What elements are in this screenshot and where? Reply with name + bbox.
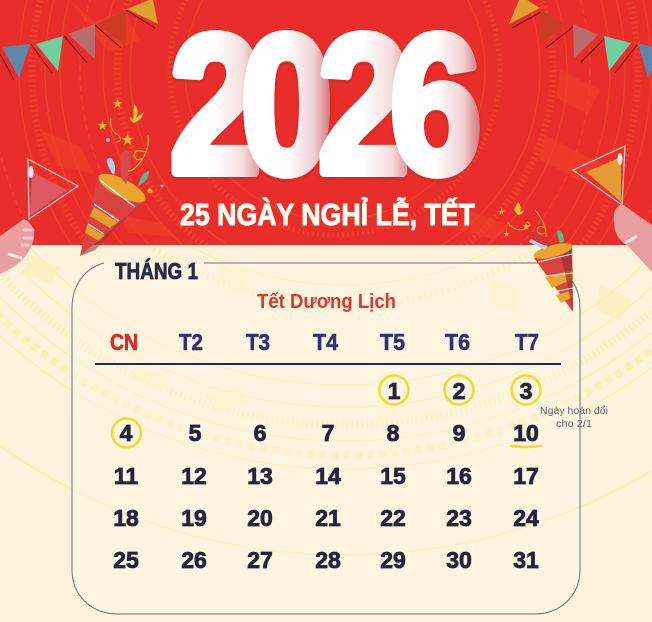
header rule — [95, 363, 561, 365]
calendar dates: 16 — [446, 463, 472, 489]
heading: 2026: 2 — [318, 0, 410, 214]
calendar dates — [113, 378, 539, 573]
calendar dates: 26 — [181, 547, 207, 573]
note: swapped day — [540, 405, 608, 430]
calendar dates: 22 — [380, 505, 406, 531]
pattern: bronze drum on cream — [0, 245, 652, 556]
icon: left party popper: ★ — [121, 132, 134, 147]
calendar dates: 9 — [453, 420, 465, 446]
heading: 2026: 0 — [241, 0, 333, 214]
calendar dates: 2 — [453, 378, 465, 404]
icon: left party popper: ★ — [97, 120, 108, 132]
weekday headers: T2 — [179, 329, 203, 355]
calendar dates: 18 — [113, 505, 139, 531]
weekday headers: T6 — [445, 329, 470, 355]
subtitle: 25 NGÀY NGHỈ LỄ, TẾT — [180, 197, 475, 232]
heading: 2026: 2 — [170, 0, 262, 214]
calendar dates: 30 — [446, 547, 472, 573]
calendar dates: 27 — [247, 547, 273, 573]
calendar dates: 25 — [113, 547, 139, 573]
calendar dates: 3 — [520, 378, 532, 404]
note: swapped day: Ngày hoán đổi — [540, 405, 608, 417]
heading: 2026: 6 — [390, 0, 482, 214]
background: cream lower section — [0, 245, 652, 622]
weekday headers: T7 — [515, 329, 539, 355]
icon: left glass and hand — [0, 159, 78, 274]
calendar dates: 14 — [315, 463, 341, 489]
heading: 2026 — [170, 0, 482, 214]
holiday markers — [112, 376, 541, 448]
calendar dates: 21 — [315, 505, 341, 531]
note: swapped day: cho 2/1 — [556, 418, 592, 430]
weekday headers: T5 — [380, 329, 405, 355]
calendar dates: 11 — [114, 463, 138, 489]
calendar dates: 4 — [120, 420, 133, 446]
calendar dates: 28 — [315, 547, 341, 573]
calendar dates: 15 — [380, 463, 406, 489]
icon: right party popper — [498, 202, 574, 312]
calendar dates: 10 — [513, 420, 539, 446]
month label: THÁNG 1 — [115, 257, 198, 284]
calendar dates: 8 — [387, 420, 400, 446]
weekday headers: CN — [110, 329, 138, 355]
calendar dates: 5 — [189, 420, 202, 446]
icon: right glass and hand — [573, 146, 652, 272]
weekday headers: T3 — [246, 329, 270, 355]
card: month frame — [72, 263, 580, 614]
calendar dates: 29 — [380, 547, 406, 573]
calendar dates: 7 — [322, 420, 334, 446]
calendar dates: 24 — [513, 505, 539, 531]
bunting flags: right — [509, 0, 652, 78]
bunting flags: left — [0, 0, 158, 80]
weekday headers — [110, 329, 539, 355]
icon: left party popper — [80, 98, 164, 256]
icon: right party popper: ★ — [522, 222, 530, 231]
calendar dates: 6 — [254, 420, 266, 446]
calendar dates: 20 — [247, 505, 273, 531]
pattern: bronze drum on red — [0, 0, 652, 245]
weekday headers: T4 — [313, 329, 338, 355]
calendar dates: 23 — [446, 505, 472, 531]
icon: right party popper: ★ — [503, 230, 510, 238]
background: red header — [0, 0, 652, 245]
calendar dates: 31 — [513, 547, 539, 573]
calendar dates: 19 — [181, 505, 207, 531]
calendar dates: 1 — [388, 378, 401, 404]
holiday title: Tết Dương Lịch — [257, 291, 396, 313]
icon: right party popper: ★ — [498, 208, 505, 216]
calendar dates: 12 — [181, 463, 207, 489]
calendar dates: 13 — [247, 463, 273, 489]
icon: left party popper: ★ — [112, 98, 123, 110]
calendar dates: 17 — [513, 463, 539, 489]
